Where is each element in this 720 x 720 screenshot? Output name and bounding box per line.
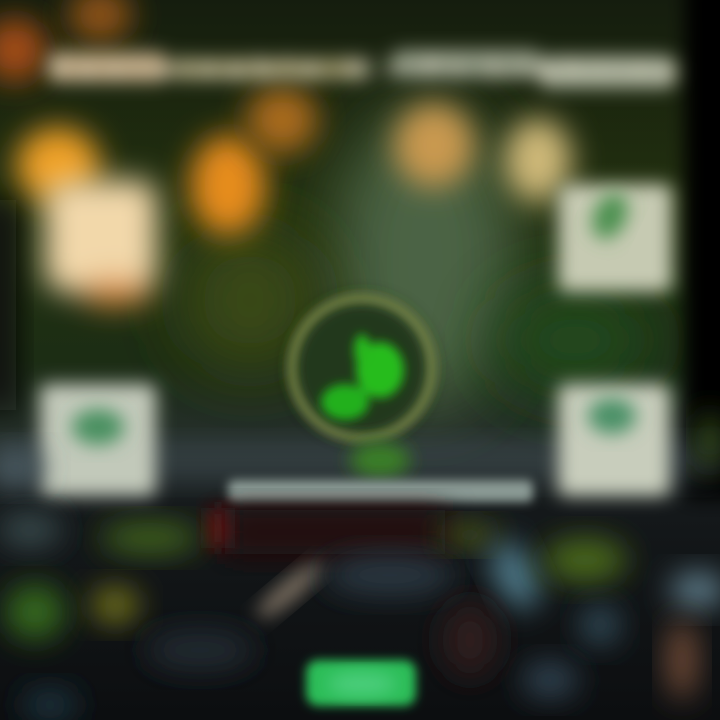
icon: leaf bottom left bbox=[72, 409, 124, 445]
card: top right bbox=[558, 184, 672, 292]
icon: leaf bottom right bbox=[588, 398, 636, 434]
card: bottom right bbox=[558, 384, 670, 496]
stem under ring bbox=[350, 442, 410, 478]
icon: leaf top right bbox=[585, 187, 635, 245]
scattered foreground debris bbox=[0, 412, 720, 720]
card: top left glowing bbox=[45, 180, 157, 306]
title: Sustainable Wi-Fi Lighting bbox=[48, 52, 678, 85]
icon: green leaf bbox=[321, 334, 404, 420]
central platform bbox=[207, 480, 533, 554]
central ring icon bbox=[292, 298, 432, 438]
green button bbox=[306, 660, 416, 706]
bokeh lights: orange bbox=[0, 0, 572, 235]
card: bottom left bbox=[40, 384, 156, 496]
